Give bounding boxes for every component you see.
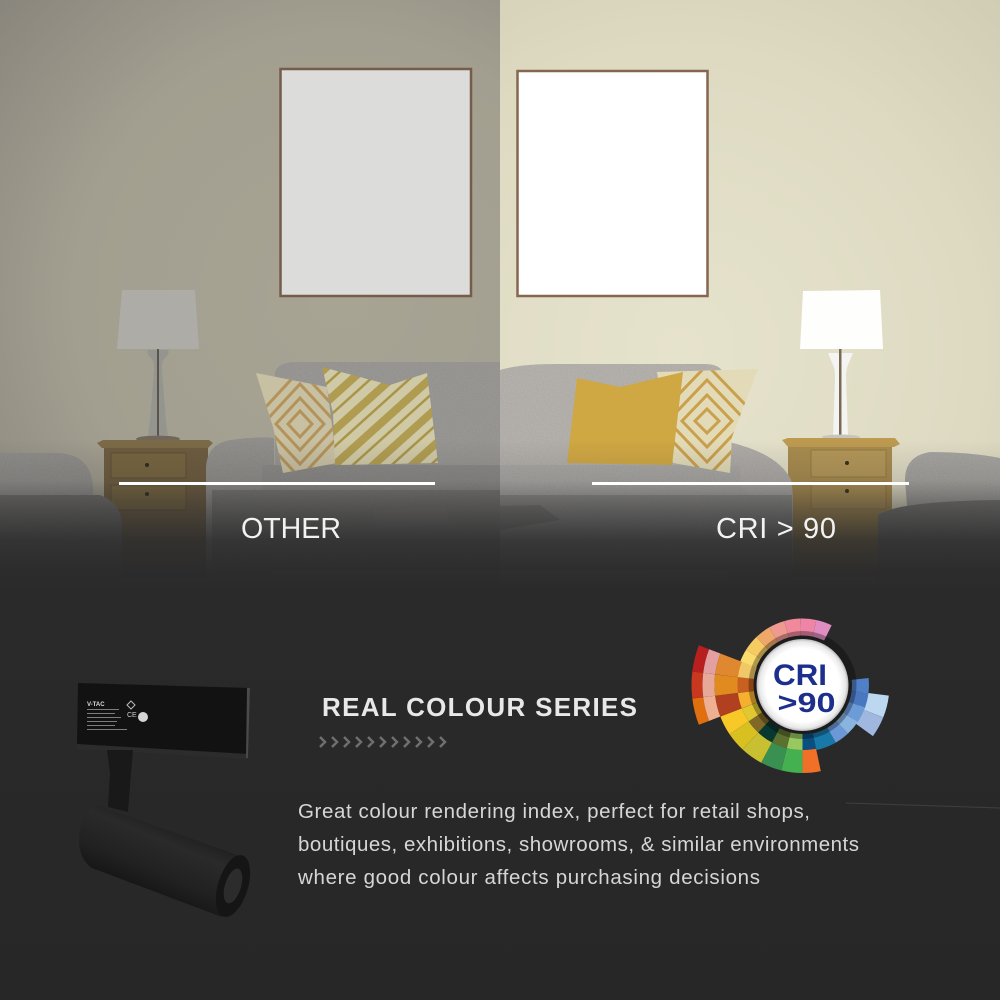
bottom fan xyxy=(694,577,911,793)
badge text xyxy=(773,659,836,718)
right books xyxy=(500,505,560,530)
CRI colour wheel badge xyxy=(666,549,939,821)
chevron row xyxy=(320,737,445,747)
product label xyxy=(87,701,148,730)
description paragraph: where good colour affects purchasing decisions xyxy=(297,866,760,889)
cylinder lens end xyxy=(209,851,257,921)
description paragraph: Great colour rendering index, perfect for retail shops, xyxy=(298,800,810,823)
comparison label: CRI above 90 xyxy=(592,482,909,545)
left side table xyxy=(97,440,213,578)
left picture frame xyxy=(280,69,471,296)
right sofa xyxy=(500,364,1000,580)
heading: REAL COLOUR SERIES xyxy=(322,692,637,722)
left striped cushion xyxy=(322,367,438,465)
product label: V-TAC xyxy=(87,702,105,708)
badge text: >90 xyxy=(778,687,836,718)
cylinder body xyxy=(79,805,243,917)
track adapter box xyxy=(77,683,250,758)
right fan xyxy=(707,589,898,781)
top arc xyxy=(720,603,885,767)
dark fade over room xyxy=(0,440,1000,590)
right mustard cushion xyxy=(567,372,683,465)
left table lamp xyxy=(117,290,199,442)
left books xyxy=(372,507,451,528)
product label: CE xyxy=(127,712,137,719)
product: track spotlight xyxy=(77,683,257,921)
white centre disc xyxy=(756,639,848,731)
badge text: CRI xyxy=(773,659,827,692)
description paragraph: boutiques, exhibitions, showrooms, & similar environments xyxy=(298,833,859,856)
room photo: other lighting (left half) xyxy=(0,0,500,557)
right table lamp xyxy=(800,290,883,440)
comparison label: other xyxy=(119,482,435,545)
faint decorative light line xyxy=(846,803,1000,808)
left sofa xyxy=(0,362,500,598)
comparison label: CRI above 90: CRI > 90 xyxy=(716,513,836,545)
right picture frame xyxy=(518,71,708,296)
right side table xyxy=(782,438,900,577)
left fan xyxy=(666,549,939,821)
stem xyxy=(107,750,133,812)
comparison label: other: OTHER xyxy=(241,513,341,545)
description paragraph xyxy=(297,800,859,889)
right patterned cushion xyxy=(657,369,758,473)
room photo: CRI above 90 lighting (right half) xyxy=(500,0,1000,620)
dark lower background xyxy=(0,590,1000,1000)
left patterned cushion xyxy=(256,373,335,473)
inner shadow ring xyxy=(754,636,852,734)
